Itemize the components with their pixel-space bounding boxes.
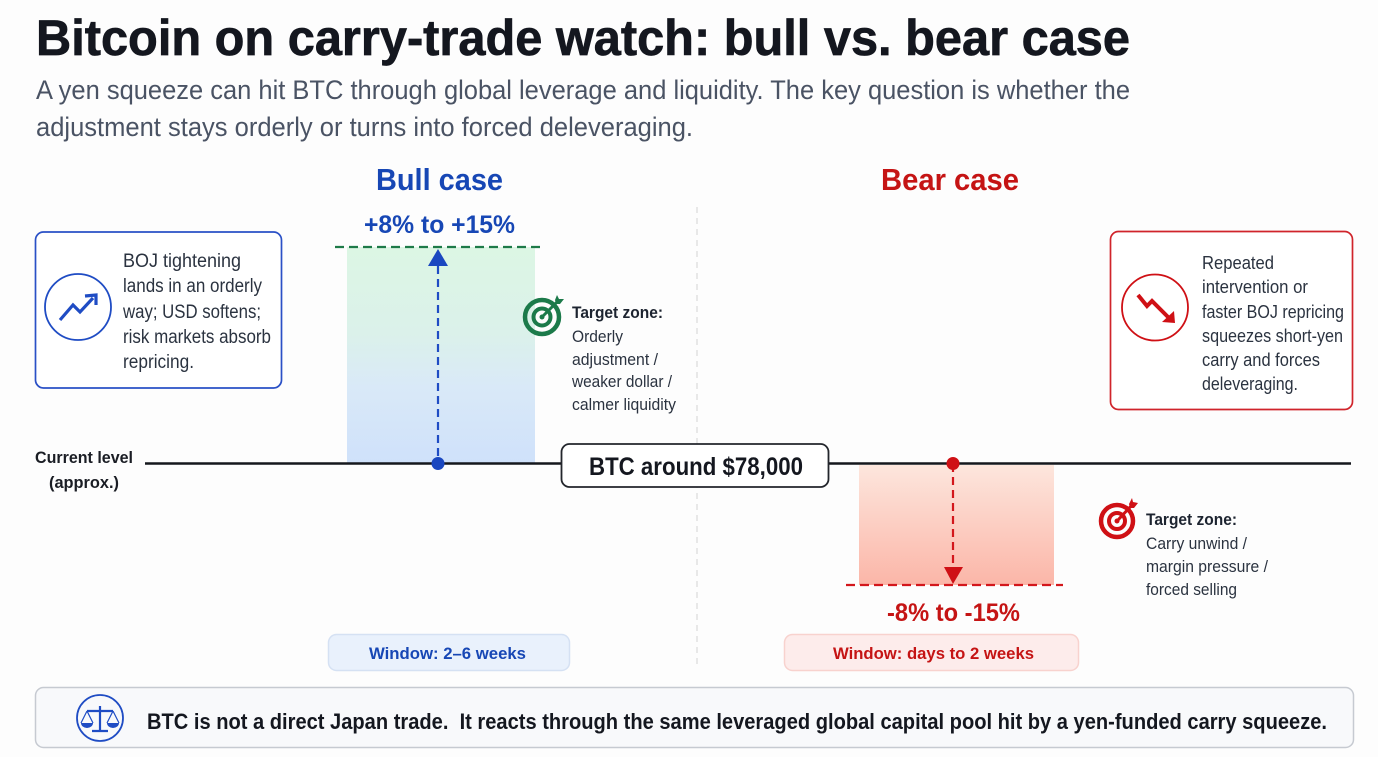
label: current level: (approx.) — [49, 473, 119, 492]
icon: rising chart arrow — [45, 274, 111, 340]
chart: bear target zone — [846, 457, 1063, 585]
callout: bull target zone — [525, 295, 676, 414]
text: bear driver — [1202, 252, 1344, 394]
label: current level: Current level — [35, 448, 133, 467]
label: bear range: -8% to -15% — [887, 599, 1020, 627]
text: bear target description — [1146, 511, 1268, 599]
text: bull driver: repricing. — [123, 352, 194, 373]
text: bear driver: faster BOJ repricing — [1202, 301, 1344, 322]
label: current level — [35, 448, 133, 492]
panel: bull driver card — [36, 232, 282, 388]
text: bear driver: deleveraging. — [1202, 373, 1298, 394]
text: bull target description: Target zone: — [572, 304, 663, 322]
pill: bear window — [784, 634, 1078, 670]
text: bear driver: intervention or — [1202, 276, 1308, 297]
pill: bear window: Window: days to 2 weeks — [833, 644, 1034, 663]
text: bear driver: squeezes short-yen — [1202, 325, 1343, 346]
text: bear target description: Carry unwind / — [1146, 534, 1247, 553]
subtitle: A yen squeeze can hit BTC through global leverage and liquidity. The key question is whether the — [36, 75, 1130, 105]
text: bull target description: adjustment / — [572, 350, 658, 369]
text: bull driver: BOJ tightening — [123, 251, 241, 272]
text: bull target description: Orderly — [572, 327, 623, 346]
text: bull driver: lands in an orderly — [123, 276, 262, 297]
text: bear driver: Repeated — [1202, 252, 1274, 273]
icon: falling chart arrow — [1122, 274, 1188, 340]
text: bull driver — [122, 251, 271, 373]
subtitle: adjustment stays orderly or turns into forced deleveraging. — [36, 112, 693, 142]
icon: green target — [525, 295, 564, 334]
chart: bull target zone — [335, 247, 544, 463]
heading: bear case: Bear case — [881, 162, 1019, 197]
panel: takeaway banner — [36, 688, 1354, 748]
pill: bull window — [328, 634, 570, 670]
title: Bitcoin on carry-trade watch: bull vs. bear case — [36, 10, 1130, 66]
callout: bear target zone — [1101, 498, 1268, 599]
label: BTC price — [562, 444, 828, 487]
text: bull target description — [571, 304, 676, 414]
icon: red target — [1101, 498, 1138, 537]
icon: balance scales — [77, 695, 123, 741]
subtitle — [36, 75, 1130, 142]
label: bull range: +8% to +15% — [364, 211, 515, 239]
text: bull driver: way; USD softens; — [122, 302, 261, 323]
pill: bull window: Window: 2–6 weeks — [369, 644, 526, 663]
label: BTC price: BTC around $78,000 — [589, 453, 803, 481]
text: bull driver: risk markets absorb — [123, 327, 271, 348]
text: bear target description: Target zone: — [1146, 511, 1237, 529]
baseline: current price line — [145, 462, 1351, 465]
panel: bear driver card — [1110, 232, 1352, 410]
text: bear target description: margin pressure / — [1146, 557, 1268, 576]
text: bull target description: calmer liquidity — [572, 395, 676, 414]
text: bear driver: carry and forces — [1202, 349, 1320, 370]
marker: bull start dot — [432, 457, 444, 470]
text: bear target description: forced selling — [1146, 580, 1237, 599]
text: bull target description: weaker dollar / — [571, 372, 672, 391]
heading: bull case: Bull case — [376, 162, 503, 197]
